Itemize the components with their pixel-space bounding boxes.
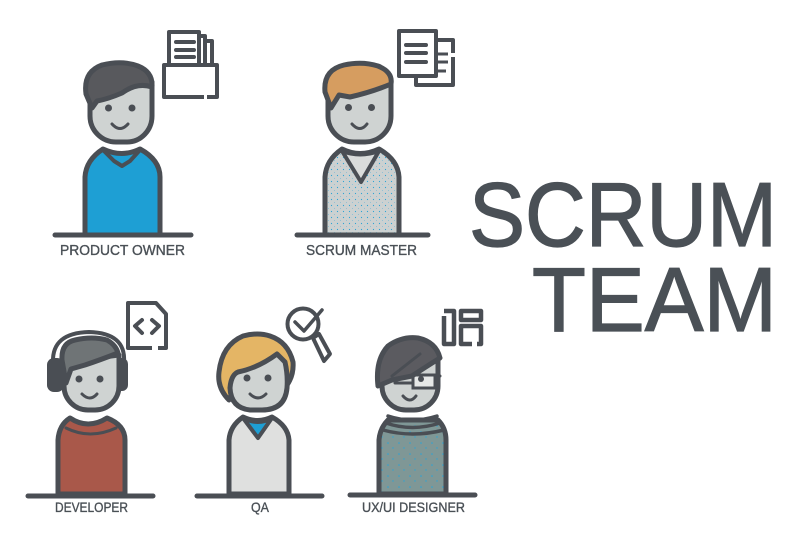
ground line (197, 494, 322, 498)
v-neck (342, 151, 379, 182)
ground line (28, 494, 153, 498)
face features (105, 104, 136, 128)
sweater collar (66, 428, 116, 434)
icon: magnifier with check (288, 308, 330, 361)
turtleneck (383, 416, 444, 434)
title: SCRUM TEAM: TEAM (532, 250, 777, 351)
label: SCRUM MASTER (306, 243, 417, 259)
smile (403, 396, 416, 400)
face features (76, 376, 104, 398)
panel: scrum master (297, 31, 453, 259)
hair (325, 63, 391, 108)
hair highlight (392, 354, 420, 376)
head (90, 82, 152, 142)
head (230, 354, 287, 410)
title: SCRUM TEAM: SCRUM (469, 165, 777, 266)
icon: document folder (164, 32, 217, 97)
icon: code file (128, 303, 166, 348)
head (382, 355, 438, 410)
icon: layout blocks (444, 311, 481, 344)
head (328, 82, 391, 142)
title: SCRUM TEAM (469, 165, 777, 351)
body: blue sweater (85, 149, 160, 235)
label: DEVELOPER (55, 499, 128, 515)
label: QA (251, 499, 270, 515)
collar (103, 150, 140, 166)
body: light sweater (229, 417, 289, 494)
hair (86, 63, 152, 108)
body: red sweater (58, 418, 125, 494)
face features (244, 374, 272, 398)
ground line (350, 492, 475, 498)
label: PRODUCT OWNER (60, 243, 185, 259)
body: teal sweater (379, 420, 446, 494)
face features (345, 104, 375, 128)
panel: UX/UI designer (350, 311, 481, 515)
glasses (395, 375, 440, 388)
panel: QA (197, 308, 330, 515)
v-neck (243, 418, 272, 438)
panel: product owner (55, 32, 217, 259)
label: UX/UI DESIGNER (362, 499, 465, 515)
hair (62, 338, 118, 383)
ground line (55, 232, 191, 238)
panel: developer (28, 303, 166, 515)
icon: documents (399, 31, 453, 85)
head (64, 355, 119, 410)
headband (53, 332, 124, 362)
right ear cup (114, 358, 128, 391)
hair (377, 338, 440, 386)
body: dotted sweater (325, 149, 399, 235)
ground line (297, 232, 428, 238)
left ear cup (47, 358, 64, 392)
hair back (219, 334, 293, 400)
